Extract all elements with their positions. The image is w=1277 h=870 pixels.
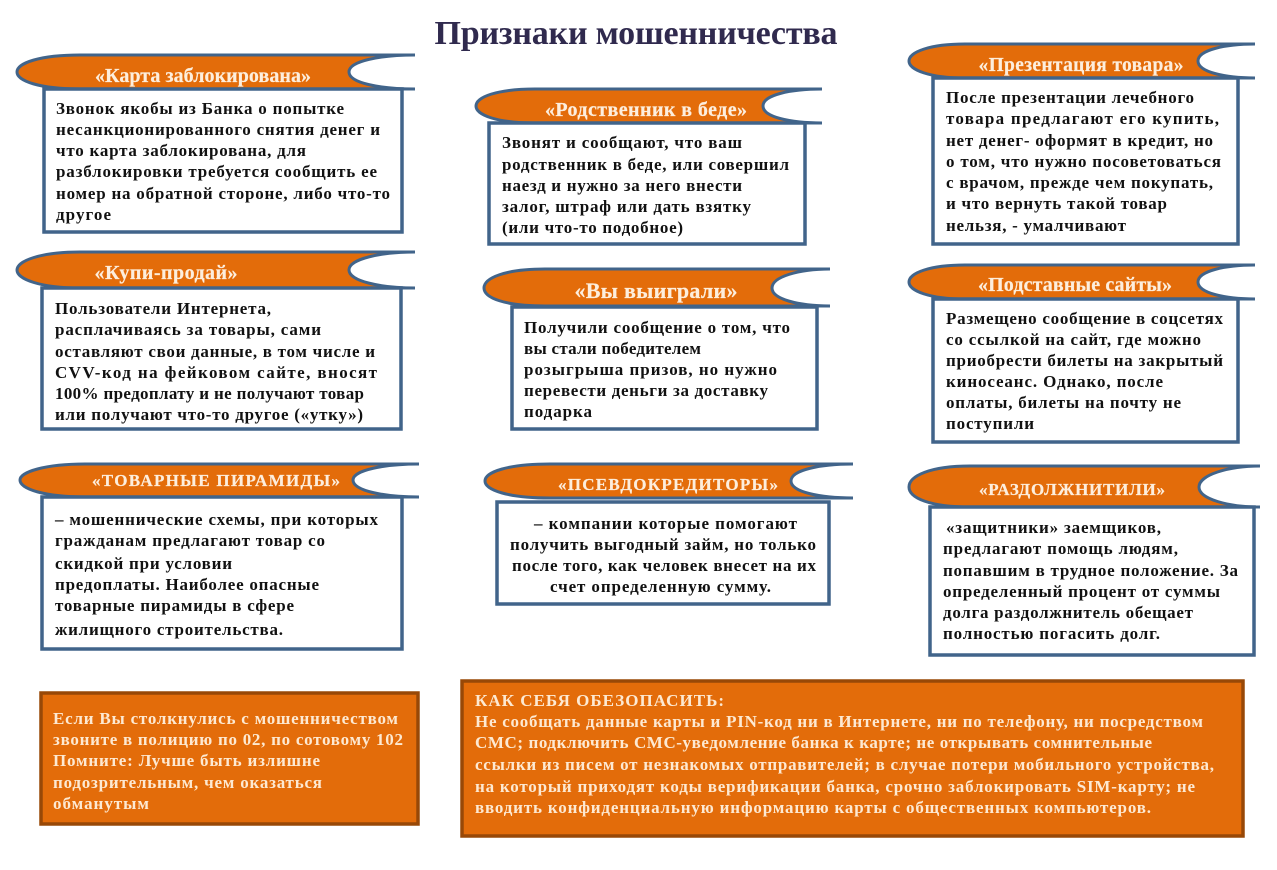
body text: киносеанс. Однако, после	[946, 372, 1163, 391]
body text: полностью погасить долг.	[943, 624, 1160, 643]
body text: попавшим в трудное положение. За	[943, 561, 1238, 580]
body box	[42, 288, 401, 429]
banner: Родственник в беде	[476, 89, 822, 123]
panel: Раздолжнители	[909, 466, 1260, 655]
body text: жилищного строительства.	[55, 620, 283, 639]
body text	[56, 99, 390, 224]
panel: Вы выиграли	[484, 269, 830, 429]
banner: Подставные сайты	[909, 265, 1255, 299]
callout: how to protect yourself	[462, 681, 1243, 836]
body text: 100% предоплату и не получают товар	[55, 384, 364, 403]
body text: товарные пирамиды в сфере	[55, 596, 294, 615]
body text	[946, 309, 1224, 433]
callout text: подозрительным, чем оказаться	[53, 773, 322, 792]
body text: предлагают помощь людям,	[943, 539, 1178, 558]
body text: расплачиваясь за товары, сами	[55, 320, 321, 339]
body text	[55, 299, 378, 424]
body text: родственник в беде, или совершил	[502, 155, 789, 174]
banner: Товарные пирамиды	[20, 464, 419, 497]
body box	[497, 502, 829, 604]
body text: Звонят и сообщают, что ваш	[502, 133, 742, 152]
body text: что карта заблокирована, для	[56, 141, 306, 160]
body text: розыгрыша призов, но нужно	[524, 360, 777, 379]
body text: оплаты, билеты на почту не	[946, 393, 1181, 412]
callout text: обманутым	[53, 794, 149, 813]
body text: со ссылкой на сайт, где можно	[946, 330, 1201, 349]
body text	[54, 510, 378, 639]
body box	[489, 123, 805, 244]
body text: или получают что-то другое («утку»)	[55, 405, 363, 424]
body text: После презентации лечебного	[946, 88, 1194, 107]
callout text: СМС; подключить СМС-уведомление банка к карте; не открывать сомнительные	[475, 733, 1152, 752]
heading: «ПСЕВДОКРЕДИТОРЫ»	[558, 475, 778, 494]
callout text	[475, 691, 1214, 817]
body text: Звонок якобы из Банка о попытке	[56, 99, 344, 118]
heading: «Карта заблокирована»	[95, 65, 311, 87]
body text: гражданам предлагают товар со	[55, 531, 325, 550]
body text: залог, штраф или дать взятку	[502, 197, 752, 216]
callout box	[41, 693, 418, 824]
body text: определенный процент от суммы	[943, 582, 1220, 601]
panel: Родственник в беде	[476, 89, 822, 244]
heading: «Подставные сайты»	[978, 274, 1172, 296]
body text	[502, 133, 789, 237]
callout text: Не сообщать данные карты и PIN-код ни в Интернете, ни по телефону, ни посредством	[475, 712, 1203, 731]
panel: Псевдокредиторы	[485, 464, 853, 604]
banner: Карта заблокирована	[17, 55, 415, 89]
title: Признаки мошенничества	[434, 15, 838, 52]
body text: о том, что нужно посоветоваться	[946, 152, 1221, 171]
banner: Презентация товара	[909, 44, 1255, 78]
body text: приобрести билеты на закрытый	[946, 351, 1223, 370]
callout text	[53, 709, 403, 813]
heading: «Купи-продай»	[94, 262, 238, 284]
body text: разблокировки требуется сообщить ее	[56, 162, 377, 181]
body text: Пользователи Интернета,	[55, 299, 271, 318]
body text: номер на обратной стороне, либо что-то	[56, 184, 390, 203]
body box	[933, 299, 1238, 442]
banner: Псевдокредиторы	[485, 464, 853, 498]
callout text: вводить конфиденциальную информацию карты с общественных компьютеров.	[475, 798, 1151, 817]
callout text: Если Вы столкнулись с мошенничеством	[53, 709, 398, 728]
callout: police contact	[41, 693, 418, 824]
body box	[930, 507, 1254, 655]
body text: скидкой при условии	[55, 554, 232, 573]
body text: (или что-то подобное)	[502, 218, 683, 237]
panel: Карта заблокирована	[17, 55, 415, 232]
body text: перевести деньги за доставку	[524, 381, 768, 400]
body box	[512, 307, 817, 429]
body text: нельзя, - умалчивают	[946, 216, 1127, 235]
callout text: на который приходят коды верификации банка, срочно заблокировать SIM-карту; не	[475, 777, 1195, 796]
banner: Купи-продай	[17, 252, 415, 288]
body text: после того, как человек внесет на их	[512, 556, 816, 575]
heading: «Родственник в беде»	[545, 99, 747, 121]
body box	[933, 78, 1238, 244]
body text: оставляют свои данные, в том числе и	[55, 342, 375, 361]
callout text: звоните в полицию по 02, по сотовому 102	[53, 730, 403, 749]
heading: «Презентация товара»	[978, 55, 1184, 76]
body text: подарка	[524, 402, 592, 421]
body text: долга раздолжнитель обещает	[943, 603, 1194, 622]
banner: Вы выиграли	[484, 269, 830, 306]
panel: Товарные пирамиды	[20, 464, 419, 649]
panel: Подставные сайты	[909, 265, 1255, 442]
body text: Получили сообщение о том, что	[524, 318, 790, 337]
panel: Купи-продай	[17, 252, 415, 429]
panel: Презентация товара	[909, 44, 1255, 244]
body text: товара предлагают его купить,	[946, 109, 1219, 128]
body text	[943, 518, 1238, 643]
body text: – мошеннические схемы, при которых	[54, 510, 378, 529]
callout text: ссылки из писем от незнакомых отправителей; в случае потери мобильного устройства,	[475, 755, 1214, 774]
body text: CVV-код на фейковом сайте, вносят	[55, 363, 378, 382]
body text: несанкционированного снятия денег и	[56, 120, 380, 139]
body text: – компании которые помогают	[533, 514, 798, 533]
body text	[510, 514, 816, 596]
body text: предоплаты. Наиболее опасные	[55, 575, 319, 594]
heading: «Вы выиграли»	[574, 278, 738, 303]
body text: наезд и нужно за него внести	[502, 176, 742, 195]
banner: Раздолжнители	[909, 466, 1260, 507]
callout text: КАК СЕБЯ ОБЕЗОПАСИТЬ:	[475, 691, 724, 710]
callout text: Помните: Лучше быть излишне	[53, 751, 320, 770]
body box	[42, 497, 402, 649]
body text: «защитники» заемщиков,	[946, 518, 1161, 537]
heading: «РАЗДОЛЖНИТИЛИ»	[979, 480, 1165, 499]
body text: нет денег- оформят в кредит, но	[946, 131, 1213, 150]
body text: другое	[56, 205, 111, 224]
body text: счет определенную сумму.	[550, 577, 771, 596]
body text: с врачом, прежде чем покупать,	[946, 173, 1213, 192]
body text: получить выгодный займ, но только	[510, 535, 816, 554]
body text	[946, 88, 1221, 235]
body text: вы стали победителем	[524, 339, 701, 358]
body text: поступили	[946, 414, 1034, 433]
body text: Размещено сообщение в соцсетях	[946, 309, 1224, 328]
heading: «ТОВАРНЫЕ ПИРАМИДЫ»	[92, 471, 340, 490]
body box	[44, 89, 402, 232]
body text	[524, 318, 790, 421]
body text: и что вернуть такой товар	[946, 194, 1167, 213]
callout box	[462, 681, 1243, 836]
